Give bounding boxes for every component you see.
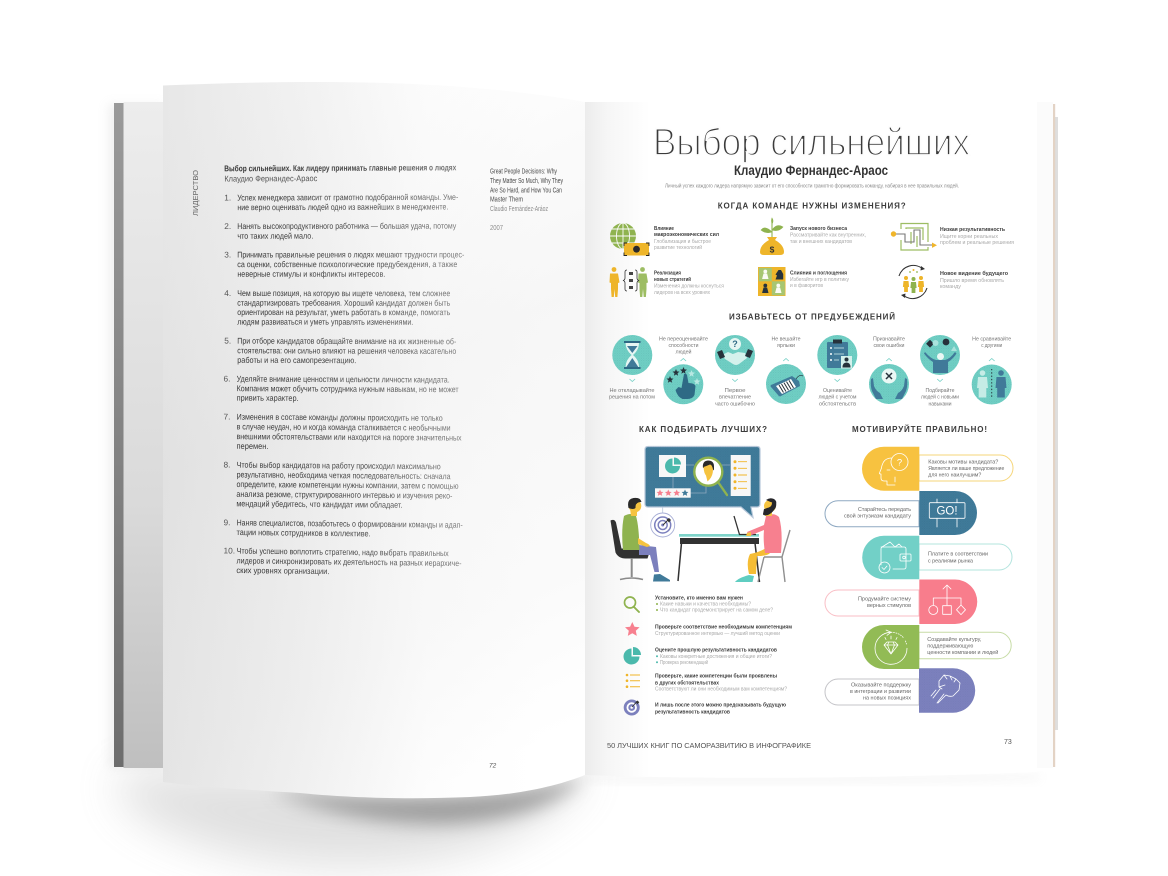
heading: when the team needs changes: КОГДА КОМАНДЕ НУЖНЫ ИЗМЕНЕНИЯ? xyxy=(718,202,906,210)
title: Выбор сильнейших xyxy=(653,122,970,164)
bias 5: assess in context xyxy=(817,335,857,408)
coloured tab with GO sign xyxy=(919,491,977,535)
text: Рассматривайте как внутренних, xyxy=(790,232,866,238)
item: macroeconomic forces xyxy=(610,223,719,256)
original book reference: They Matter So Much, Why They xyxy=(490,176,563,185)
bias 3: first impression xyxy=(715,335,755,408)
icon: hands with X xyxy=(869,364,909,404)
text: проблем и реальные решения xyxy=(940,240,1014,246)
text: Соответствуют ли они необходимым вам компетенциям? xyxy=(655,687,787,693)
item 5: 5. xyxy=(224,336,231,346)
text: в других обстоятельствах xyxy=(655,679,719,686)
coloured tab with diamond xyxy=(862,625,919,669)
row 2: enthusiasm xyxy=(825,491,977,535)
bias 1: do not postpone xyxy=(609,335,655,401)
item 1: ние верно оценивать людей одно из важнейших в менеджменте. xyxy=(237,202,448,212)
icon: pie chart xyxy=(624,647,641,664)
chevron xyxy=(937,379,943,382)
item 3 xyxy=(224,249,465,279)
icon: list xyxy=(626,674,640,688)
text: Продумайте систему xyxy=(858,596,911,602)
item: low performance xyxy=(891,224,1014,250)
text: лидеров на всех уровнях xyxy=(654,290,710,296)
heading: motivate correctly: МОТИВИРУЙТЕ ПРАВИЛЬНО! xyxy=(852,425,987,434)
item 1: Успех менеджера зависит от грамотно подобранной команды. Уме- xyxy=(237,192,459,202)
heading: how to pick the best: КАК ПОДБИРАТЬ ЛУЧШИХ? xyxy=(639,425,767,434)
text: Проверьте, какие компетенции были проявлены xyxy=(655,673,777,680)
original book reference: Are So Hard, and How You Can xyxy=(490,185,562,194)
outline pill xyxy=(825,679,919,705)
text: навыками xyxy=(928,402,952,408)
row 4: incentives xyxy=(825,580,977,624)
page number 72: 72 xyxy=(489,762,497,770)
item 7: 7. xyxy=(223,412,230,422)
icon: handshake with question mark: ? xyxy=(732,339,738,349)
item 3: 3. xyxy=(224,250,231,260)
bias 7: new skills xyxy=(920,335,960,408)
item 1: 1. xyxy=(224,193,231,203)
target icon xyxy=(651,507,675,537)
right page underlayer and edges xyxy=(1037,102,1058,768)
text: Не вешайте xyxy=(772,336,801,342)
icon: target xyxy=(624,700,640,716)
text: Оказывайте поддержку xyxy=(851,682,911,688)
text: для него наилучшим? xyxy=(928,473,981,479)
footer: book title: 50 ЛУЧШИХ КНИГ ПО САМОРАЗВИТИЮ В ИНФОГРАФИКЕ xyxy=(607,741,811,750)
numbered list of takeaways xyxy=(223,192,465,578)
text: решения на потом xyxy=(609,395,655,401)
text xyxy=(790,225,866,245)
text: Каковы конкретные достижения и общие итоги? xyxy=(660,654,772,660)
item 4: людям развиваться и уметь управлять изменениями. xyxy=(237,317,413,327)
chevron xyxy=(680,358,686,361)
right person with laptop xyxy=(735,498,790,582)
text: так и внешних кандидатов xyxy=(790,239,852,245)
row 1: motives xyxy=(862,447,1013,491)
text: Глобализация и быстрое xyxy=(654,239,711,245)
item 10: Чтобы успешно воплотить стратегию, надо выбрать правильных xyxy=(237,546,449,558)
text: Старайтесь передать xyxy=(858,506,911,513)
text: поддерживающую xyxy=(927,644,973,650)
text: с реалиями рынка xyxy=(928,558,973,564)
text: Не сравнивайте xyxy=(972,336,1011,342)
item 7: в случае неудач, но и когда команда сталкивается с необычными xyxy=(237,421,451,433)
text: Оцените прошлую результативность кандидатов xyxy=(655,647,777,653)
original book reference: Great People Decisions: Why xyxy=(490,166,557,176)
intro sentence: Личный успех каждого лидера напрямую зависит от его способности грамотно формировать команду, набирая в нее правильных людей. xyxy=(665,182,959,190)
item 4: стандартизировать требования. Хороший кандидат должен быть xyxy=(237,298,450,308)
text: свой энтузиазм кандидату xyxy=(844,513,911,520)
step 2 xyxy=(625,622,792,637)
item 10: ских уровнях организации. xyxy=(236,565,330,576)
icon: money bag with sprout: $ xyxy=(770,244,775,254)
item 7: Изменения в составе команды должны происходить не только xyxy=(237,412,443,423)
item 5 xyxy=(224,336,457,365)
icon: two people and checklist xyxy=(610,267,648,297)
text xyxy=(921,387,959,408)
bias 8: do not compare xyxy=(972,336,1012,404)
text: верных стимулов xyxy=(867,603,911,609)
bias 6: admit mistakes xyxy=(869,336,909,404)
step 4 xyxy=(626,673,787,693)
text xyxy=(655,596,773,614)
text xyxy=(927,636,998,656)
item: strategy implementation xyxy=(610,267,724,297)
item 3: са оценки, собственные психологические предубеждения, а также xyxy=(237,259,458,269)
bias row xyxy=(609,335,1012,408)
coloured tab with fist xyxy=(919,668,975,713)
text xyxy=(928,460,1004,479)
item 7: перемен. xyxy=(236,441,269,451)
text xyxy=(654,270,724,296)
item 8: 8. xyxy=(223,459,230,470)
row 5: culture xyxy=(862,625,1011,669)
text: Создавайте культуру, xyxy=(927,636,981,643)
chevron xyxy=(732,379,738,382)
left person seated xyxy=(610,498,670,582)
chevron xyxy=(783,358,789,361)
text: Какие навыки и качества необходимы? xyxy=(660,602,751,608)
left page content xyxy=(191,162,563,770)
text: свои ошибки xyxy=(874,343,905,349)
text: ценности компании и людей xyxy=(927,649,998,656)
text: Низкая результативность xyxy=(940,227,1005,233)
text: Первое xyxy=(724,388,746,394)
icon: globe with banknote xyxy=(610,223,649,256)
item 8: мендаций убедитесь, что кандидат ими обладает. xyxy=(236,498,402,510)
step 3 xyxy=(624,647,777,666)
original book reference xyxy=(490,166,563,232)
outline pill xyxy=(825,590,919,616)
icon: barcode tag xyxy=(766,364,806,404)
icon: juggling person xyxy=(920,335,960,375)
text: Каковы мотивы кандидата? xyxy=(928,460,998,466)
outline pill xyxy=(825,501,919,527)
item 2: Нанять высокопродуктивного работника — большая удача, потому xyxy=(237,221,457,231)
item 2: что таких людей мало. xyxy=(237,231,313,241)
item 9: Наняв специалистов, позаботьтесь о формировании команды и адап- xyxy=(237,517,463,530)
shadow under the book xyxy=(108,104,1040,866)
icon: star xyxy=(625,622,640,636)
item 6: Уделяйте внимание ценностям и цельности личности кандидата. xyxy=(237,374,450,385)
text xyxy=(655,673,787,693)
text: новых стратегий xyxy=(654,276,691,283)
item 10: лидеров и синхронизировать их деятельность на разных иерархиче- xyxy=(237,555,462,568)
desk xyxy=(678,516,760,582)
item 4: 4. xyxy=(224,288,231,298)
text xyxy=(940,270,1008,290)
back pages of left side xyxy=(124,102,164,768)
item 3: Принимать правильные решения о людях мешают трудности процес- xyxy=(237,249,465,259)
icon: hand and stars xyxy=(663,364,703,404)
text xyxy=(772,336,801,349)
book spine edge xyxy=(114,103,124,767)
text: впечатление xyxy=(719,395,751,401)
text: развитие технологий xyxy=(654,244,702,251)
text: И лишь после этого можно предсказывать будущую xyxy=(655,701,787,708)
text xyxy=(818,387,857,408)
text xyxy=(654,226,719,251)
author: Клаудио Фернандес-Араос xyxy=(734,163,888,178)
speech bubble with candidate data xyxy=(645,446,760,518)
text: команду xyxy=(940,284,962,290)
checklist: selection steps xyxy=(624,596,792,716)
coloured tab with flow diagram xyxy=(919,580,977,624)
text: Подбирайте xyxy=(926,387,955,394)
row 6: support xyxy=(825,668,975,713)
text: Установите, кто именно вам нужен xyxy=(655,596,743,602)
text: Платите в соответствии xyxy=(928,552,988,558)
text: и в фаворитов xyxy=(790,283,823,289)
icon: maze xyxy=(891,224,937,250)
original book reference: Master Them xyxy=(490,194,523,204)
icon: chess board xyxy=(758,267,786,296)
item 7 xyxy=(223,412,462,452)
text xyxy=(873,336,905,349)
bias 4: do not label xyxy=(766,336,806,404)
item 9: тации новых сотрудников в коллективе. xyxy=(237,527,371,538)
text: с другими xyxy=(981,343,1002,349)
illustration: interview scene xyxy=(610,446,790,582)
text: Новое видение будущего xyxy=(940,270,1008,277)
text: Проверьте соответствие необходимым компетенциям xyxy=(655,623,792,630)
item: mergers and acquisitions xyxy=(758,267,849,296)
text: Слияния и поглощения xyxy=(790,270,847,276)
page number 73: 73 xyxy=(1004,739,1012,746)
text: Что кандидат продемонстрирует на самом деле? xyxy=(660,608,773,614)
text: людей с новыми xyxy=(921,394,959,401)
book heading: Выбор сильнейших. Как лидеру принимать главные решения о людях xyxy=(224,162,457,173)
outline pill xyxy=(919,455,1013,481)
item 3: неверные стимулы и конфликты интересов. xyxy=(237,269,385,279)
outline pill xyxy=(919,632,1011,659)
text xyxy=(609,387,655,401)
text: Влияние xyxy=(654,226,674,232)
text: Является ли ваше предложение xyxy=(928,466,1004,472)
text: в интеграции и развитии xyxy=(850,689,911,695)
step 5 xyxy=(624,700,787,716)
original book reference: 2007 xyxy=(490,223,503,232)
coloured tab with head icon xyxy=(862,447,919,491)
item 4: Чем выше позиция, на которую вы ищете человека, тем сложнее xyxy=(237,288,451,298)
text xyxy=(972,336,1011,349)
text: часто ошибочно xyxy=(715,402,755,408)
book heading: Клаудио Фернандес-Араос xyxy=(224,173,317,183)
text: Избегайте игр в политику xyxy=(790,276,849,283)
item 4 xyxy=(224,288,451,327)
text: результативность кандидатов xyxy=(655,709,730,715)
icon: people inside circular arrows xyxy=(899,265,927,299)
item 10: 10. xyxy=(223,545,235,556)
item 6: 6. xyxy=(223,374,230,384)
text: способности xyxy=(668,343,699,349)
text: Ищите корни реальных xyxy=(940,234,999,240)
icon: two people with dotted divider xyxy=(972,364,1012,404)
panel: left page xyxy=(163,82,585,798)
coloured tab with wallet xyxy=(862,536,919,579)
item 4: ориентирован на результат, уметь работать в команде, помогать xyxy=(237,307,450,317)
text xyxy=(858,596,911,609)
text: людей xyxy=(676,348,692,356)
text xyxy=(655,701,787,715)
item 1 xyxy=(224,192,459,212)
panel: right page xyxy=(585,102,1037,778)
item: new business xyxy=(760,218,866,255)
coloured tab with head icon: ? xyxy=(897,458,902,468)
outline pill xyxy=(919,544,1012,570)
chevron xyxy=(989,358,995,361)
text: Не откладывайте xyxy=(610,387,655,394)
icon: clipboard and person xyxy=(817,335,857,375)
item 6: Компания может обучить сотрудника нужным навыкам, но не может xyxy=(237,383,459,394)
text: Проверка рекомендаций xyxy=(660,659,708,666)
text: Пришло время обновлять xyxy=(940,278,1004,284)
original book reference: Claudio Fernández-Aráoz xyxy=(490,204,548,213)
item 5: стоятельства: они сильно влияют на решения человека касательно xyxy=(237,345,457,356)
item 6 xyxy=(223,374,459,404)
chevron xyxy=(630,379,635,382)
item 8: Чтобы выбор кандидатов на работу происходил максимально xyxy=(237,460,441,471)
motivation stack xyxy=(825,447,1013,713)
bias 2: do not overestimate xyxy=(659,336,708,404)
heading: get rid of biases: ИЗБАВЬТЕСЬ ОТ ПРЕДУБЕЖДЕНИЙ xyxy=(729,312,895,322)
item 8 xyxy=(223,459,459,510)
chevron xyxy=(834,379,840,382)
text: Реализация xyxy=(654,270,681,276)
text xyxy=(655,623,792,637)
text xyxy=(655,647,777,666)
text xyxy=(659,336,708,356)
item 8: результативно, необходима четкая последовательность: сначала xyxy=(237,469,451,481)
item 2 xyxy=(224,221,457,241)
item 5: При отборе кандидатов обращайте внимание на их жизненные об- xyxy=(237,336,457,346)
text: на новых позициях xyxy=(863,696,911,702)
text: Структурированное интервью — лучший метод оценки xyxy=(655,630,780,637)
item 10 xyxy=(223,545,462,578)
book heading xyxy=(224,162,457,183)
right page content xyxy=(607,122,1014,750)
section label: vertical: ЛИДЕРСТВО xyxy=(191,170,200,216)
item 6: привить характер. xyxy=(237,393,299,403)
text: Изменения должны коснуться xyxy=(654,284,724,290)
chevron xyxy=(886,358,892,361)
text: макроэкономических сил xyxy=(654,232,719,238)
item 7: внешними обстоятельствами или находится на пороге значительных xyxy=(237,431,462,443)
item 9: 9. xyxy=(223,517,230,527)
item 8: анализа резюме, структурированного интервью и изучения реко- xyxy=(236,489,453,501)
icon: hourglass xyxy=(612,335,652,375)
text: обстоятельств xyxy=(819,402,856,408)
text: Не переоценивайте xyxy=(659,336,708,342)
text xyxy=(715,388,755,408)
text: Признавайте xyxy=(873,336,905,342)
item 8: определите, какие компетенции нужны компании, затем с помощью xyxy=(237,479,459,491)
item: new vision of the future xyxy=(899,265,1008,299)
text xyxy=(844,506,911,520)
item 2: 2. xyxy=(224,221,231,231)
text xyxy=(928,552,988,564)
row 3: market pay xyxy=(862,536,1012,579)
text xyxy=(940,227,1014,246)
text xyxy=(850,682,911,702)
text xyxy=(790,270,849,289)
step 1 xyxy=(624,596,773,614)
item 9 xyxy=(223,517,463,539)
coloured tab with GO sign: GO! xyxy=(936,506,958,518)
text: Запуск нового бизнеса xyxy=(790,225,847,232)
icon: magnifier xyxy=(624,597,639,612)
text: ярлыки xyxy=(777,343,795,349)
text: людей с учетом xyxy=(818,394,857,401)
text: Оценивайте xyxy=(823,387,852,394)
item 5: работы и на его самопрезентацию. xyxy=(237,355,356,365)
